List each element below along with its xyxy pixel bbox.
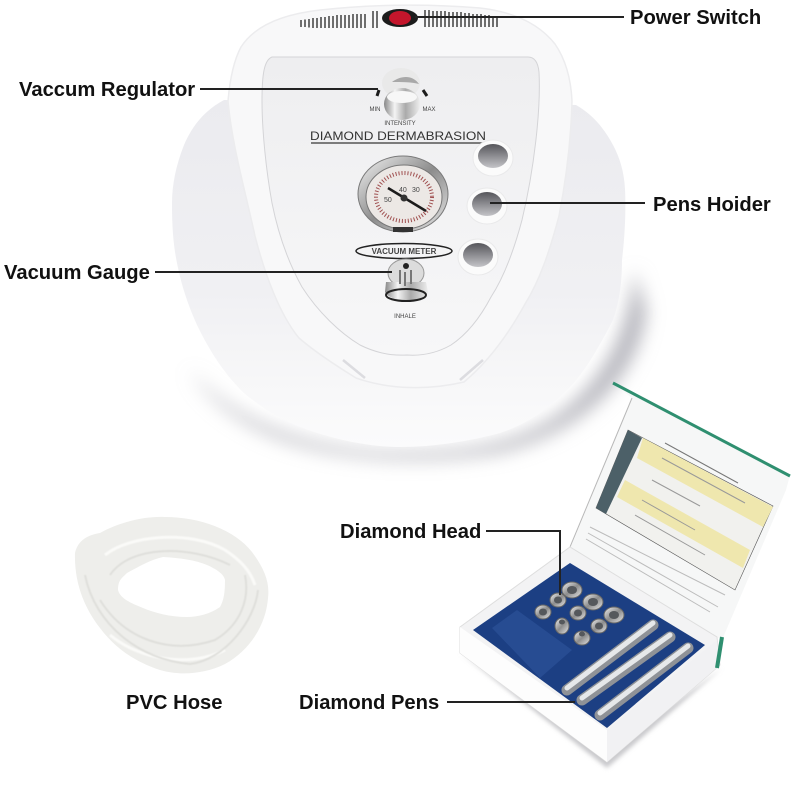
pen holder middle	[467, 188, 507, 224]
vacuum gauge dial: 30	[412, 187, 420, 194]
panel title: DIAMOND DERMABRASION	[310, 131, 486, 143]
vacuum regulator knob: MIN	[370, 107, 380, 113]
callout: power switch: Power Switch	[630, 7, 761, 29]
lid left edge	[570, 398, 632, 547]
callout: pens holder: Pens Hoider	[653, 194, 771, 216]
vacuum meter label: VACUUM METER	[372, 247, 437, 256]
diamond heads	[535, 582, 624, 645]
vacuum regulator knob: MAX	[422, 107, 436, 113]
callout: vacuum regulator: Vaccum Regulator	[19, 79, 195, 101]
blue velvet insert	[473, 563, 705, 728]
inhale connector: INHALE	[394, 314, 416, 320]
pen holder top	[473, 140, 513, 176]
vacuum gauge dial	[358, 156, 448, 232]
box tray outer	[460, 547, 720, 762]
inhale connector	[385, 259, 428, 320]
hose compartment recess	[492, 610, 572, 678]
label: PVC hose: PVC Hose	[126, 692, 222, 714]
callout: diamond pens: Diamond Pens	[299, 692, 439, 714]
box shadow	[460, 653, 722, 768]
diamond pens	[567, 623, 688, 715]
PVC hose coil	[75, 517, 268, 673]
vacuum regulator knob	[370, 68, 436, 127]
vacuum regulator knob: INTENSITY	[384, 121, 416, 127]
box lid with instruction sheet	[570, 383, 790, 640]
machine base	[172, 100, 625, 447]
callout: vacuum gauge: Vacuum Gauge	[4, 262, 150, 284]
callout: diamond head	[340, 521, 560, 595]
base ridge contours	[343, 360, 483, 380]
machine shadow	[190, 270, 646, 459]
machine: diamond dermabrasion unit	[172, 5, 646, 459]
callout: diamond head: Diamond Head	[340, 521, 481, 543]
raised top panel	[228, 5, 572, 388]
green side tab	[717, 637, 722, 668]
instruction card	[596, 430, 773, 590]
vacuum meter label	[356, 244, 452, 258]
pen holder bottom	[458, 239, 498, 275]
diamond head centres	[539, 586, 619, 636]
power switch	[382, 9, 418, 27]
vacuum gauge dial: 40	[399, 187, 407, 194]
vacuum gauge dial: 50	[384, 197, 392, 204]
presentation box	[460, 383, 790, 768]
recessed face plate	[262, 57, 539, 355]
ventilation slots	[301, 10, 497, 28]
lid green edge	[613, 383, 790, 476]
